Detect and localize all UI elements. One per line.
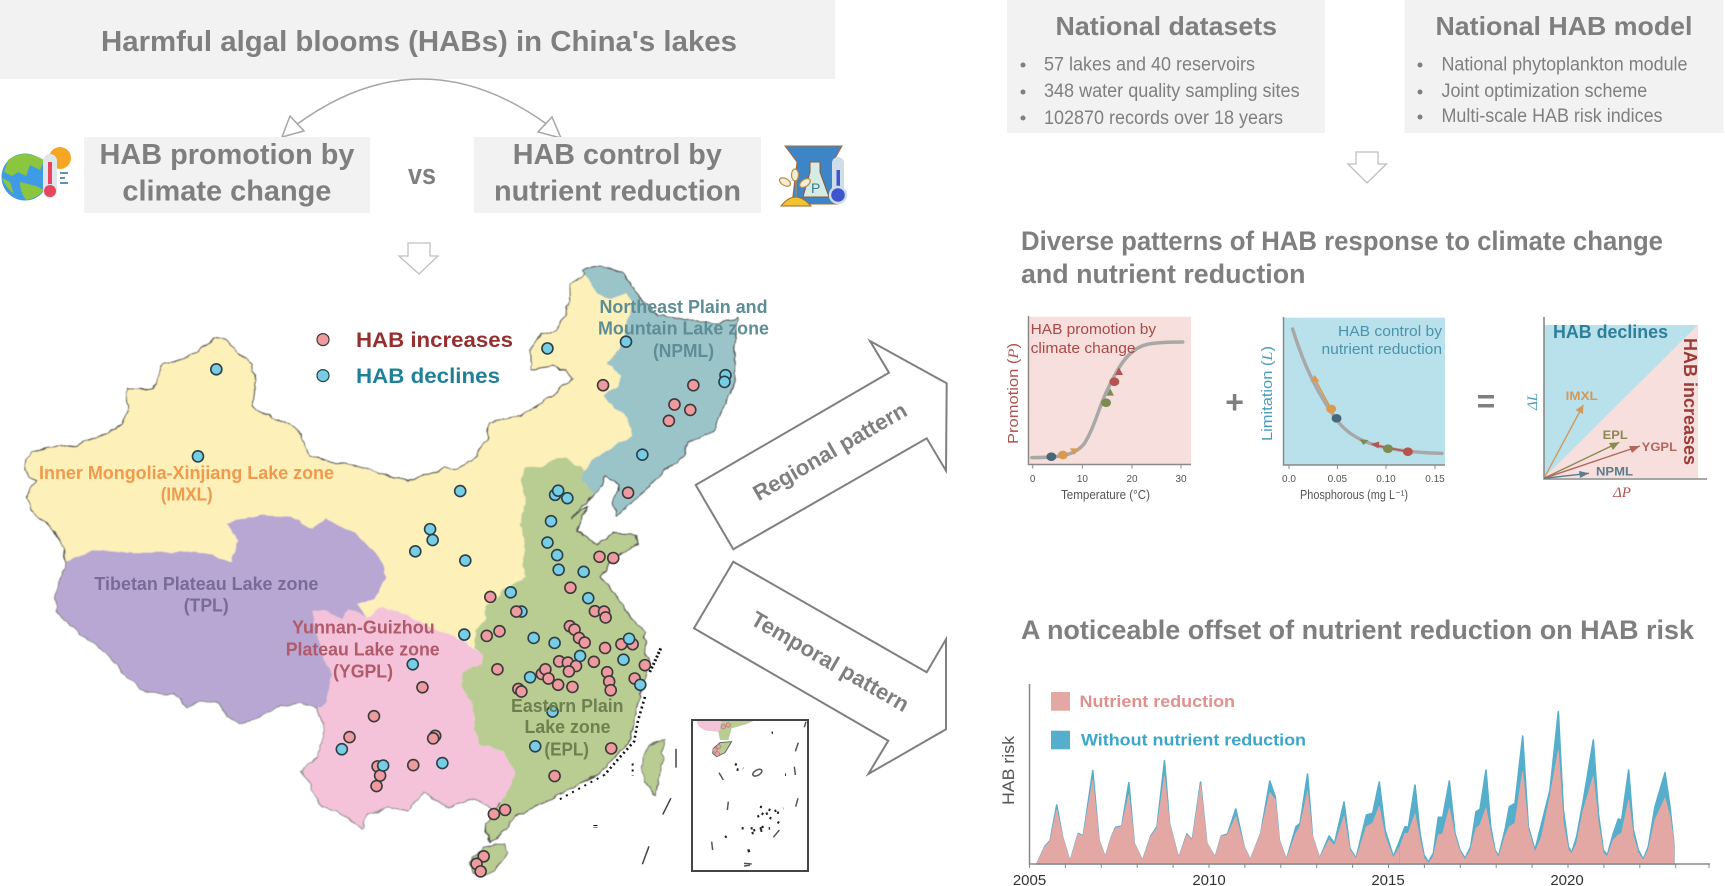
region: NPML (582, 266, 737, 515)
title: Harmful algal blooms (HABs) in China's lakes (101, 26, 737, 58)
chart legend (1051, 692, 1306, 750)
second overlap: pink dot above blue pair (511, 606, 522, 617)
panel: national HAB model: Joint optimization scheme (1442, 81, 1647, 102)
label: EPL zone: (EPL) (544, 740, 589, 760)
map legend (317, 329, 513, 388)
panel: national datasets: 57 lakes and 40 reservoirs (1044, 55, 1255, 76)
chart: promotion curve: 30 (1175, 474, 1187, 485)
panel: national HAB model: National HAB model (1436, 11, 1692, 41)
chart: response quadrant: ΔL (1525, 393, 1541, 411)
chart: promotion curve (1005, 316, 1191, 502)
chart: response quadrant: ΔP (1612, 485, 1631, 501)
panel: national datasets: National datasets (1056, 11, 1277, 41)
icon: fertilizer bag with flask and thermometer: P (811, 180, 820, 196)
chart: promotion curve: 0 (1030, 474, 1036, 485)
dots: HAB increases (344, 380, 699, 877)
region: IMXL (26, 274, 633, 648)
chart: promotion curve: Temperature (°C) (1061, 487, 1150, 502)
chart: limitation curve: 0.0 (1282, 474, 1296, 485)
panel: HAB control by nutrient reduction: HAB control by (513, 139, 722, 171)
label: EPL zone: Eastern Plain (511, 696, 624, 716)
panel: HAB control by nutrient reduction: nutrient reduction (494, 176, 741, 208)
chart: response quadrant: HAB increases (1680, 338, 1700, 465)
map of China lake zones (26, 266, 737, 877)
label: IMXL zone: Inner Mongolia-Xinjiang Lake zone (39, 463, 334, 483)
inset: South China Sea (692, 720, 808, 871)
chart: limitation curve: nutrient reduction (1322, 341, 1442, 358)
chart: response quadrant: IMXL (1566, 389, 1598, 403)
label: EPL zone: Lake zone (524, 717, 610, 737)
panel: HAB promotion by climate change: climate change (122, 176, 331, 208)
arrow: regional pattern: Regional pattern (748, 397, 911, 506)
chart: promotion curve: climate change (1031, 340, 1136, 357)
title (0, 0, 835, 79)
chart: promotion curve: Promotion (P) (1005, 343, 1022, 444)
chart: limitation curve: Limitation (L) (1259, 346, 1276, 441)
label: TPL zone: Tibetan Plateau Lake zone (94, 574, 318, 594)
label: NPML zone: Mountain Lake zone (598, 319, 769, 339)
chart legend: Nutrient reduction (1080, 692, 1235, 711)
panel: national datasets: 102870 records over 18 years (1044, 108, 1283, 129)
panel: national HAB model (1404, 0, 1724, 133)
chart: limitation curve (1259, 317, 1445, 502)
label: TPL zone: (TPL) (184, 596, 229, 616)
region: TPL (56, 515, 385, 724)
arrow: down to map (399, 243, 438, 274)
label: NPML zone: (NPML) (653, 341, 714, 361)
region: EPL (462, 458, 650, 843)
heading: noticeable offset: A noticeable offset of nutrient reduction on HAB risk (1021, 615, 1695, 645)
panel: national HAB model: National phytoplankton module (1442, 55, 1688, 76)
label: YGPL zone: Plateau Lake zone (286, 640, 440, 660)
country outline (26, 266, 737, 843)
chart: response quadrant: YGPL (1642, 440, 1677, 454)
axes (1030, 684, 1710, 864)
label: YGPL zone: (YGPL) (333, 662, 393, 682)
arrow: two-way arc between drivers (282, 79, 561, 138)
chart legend: Without nutrient reduction (1081, 731, 1306, 750)
arrow: regional pattern (696, 341, 947, 549)
label: NPML zone (598, 297, 769, 361)
chart: response quadrant: HAB declines (1553, 322, 1668, 342)
chart: limitation curve: Phosphorous (mg L⁻¹) (1300, 487, 1408, 502)
arrow: temporal pattern: Temporal pattern (747, 606, 913, 717)
symbol: plus: + (1225, 384, 1244, 420)
chart: limitation curve: HAB control by (1338, 323, 1443, 340)
label: IMXL zone: (IMXL) (161, 485, 213, 505)
panel: HAB promotion by climate change: HAB promotion by (100, 139, 354, 171)
coastal islets (559, 648, 676, 864)
region: Hainan and Taiwan (469, 740, 663, 876)
chart: response quadrant: EPL (1603, 428, 1628, 442)
icon: fertilizer bag with flask and thermometer (778, 146, 846, 206)
panel: national datasets (1007, 0, 1325, 133)
label: IMXL zone (39, 463, 334, 505)
map legend: HAB increases (356, 329, 513, 352)
symbol: equals: = (1477, 383, 1495, 419)
region: YGPL (301, 607, 515, 828)
series 2005-2015 (1037, 761, 1400, 864)
panel: HAB control by nutrient reduction (474, 137, 761, 213)
label: YGPL zone: Yunnan-Guizhou (292, 618, 435, 638)
dots: HAB declines (192, 336, 731, 771)
chart: promotion curve: HAB promotion by (1031, 321, 1157, 338)
chart: HAB risk time series (999, 684, 1710, 886)
panel: national HAB model: Multi-scale HAB risk indices (1442, 106, 1662, 127)
chart: promotion curve: 10 (1077, 474, 1088, 485)
panel: national datasets: 348 water quality sampling sites (1044, 81, 1300, 102)
heading: diverse patterns: and nutrient reduction (1021, 259, 1306, 289)
map legend: HAB declines (356, 365, 500, 388)
arrow: temporal pattern (694, 562, 946, 774)
chart: response quadrant (1525, 317, 1707, 501)
chart: limitation curve: 0.05 (1328, 474, 1348, 485)
icon: globe with thermometer and sun (2, 147, 71, 200)
heading: diverse patterns: Diverse patterns of HAB response to climate change (1021, 226, 1663, 256)
chart: HAB risk time series: HAB risk (999, 735, 1018, 805)
text: vs: vs (408, 159, 436, 191)
chart: response quadrant: NPML (1596, 464, 1633, 478)
label: TPL zone (94, 574, 318, 616)
label: YGPL zone (286, 618, 440, 682)
label: EPL zone (511, 696, 624, 760)
panel: HAB promotion by climate change (84, 137, 370, 213)
chart: promotion curve: 20 (1126, 474, 1138, 485)
label: NPML zone: Northeast Plain and (600, 297, 768, 317)
arrow: down to patterns (1348, 152, 1386, 183)
heading: diverse patterns (1021, 226, 1663, 289)
chart: limitation curve: 0.10 (1376, 474, 1396, 485)
series 2015-2023 (1400, 712, 1674, 864)
chart: limitation curve: 0.15 (1425, 474, 1445, 485)
